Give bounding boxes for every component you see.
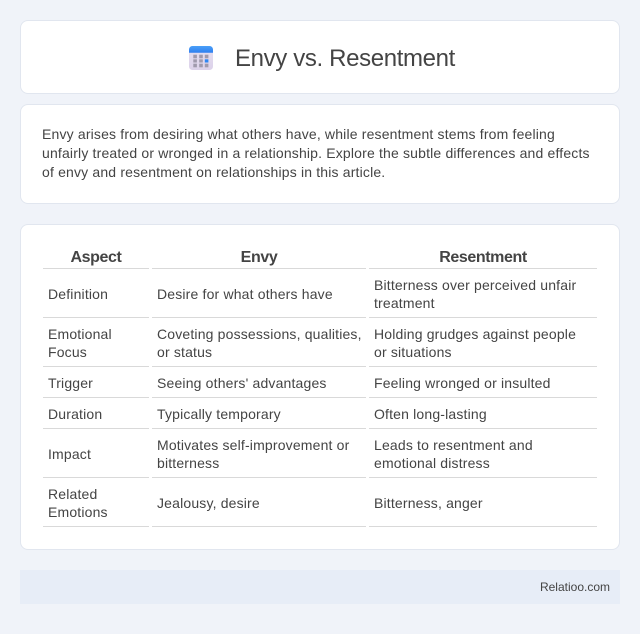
row: duration: Duration [48,406,102,422]
row: impact [43,437,597,478]
row: duration [43,406,597,429]
footer text: Relatioo.com [540,580,610,594]
row: definition: treatment [374,295,435,311]
table header: Resentment [439,249,527,266]
text block: introduction [42,126,590,180]
row: emotional focus: Focus [48,344,87,360]
row: emotional focus [43,326,597,367]
row: trigger: Trigger [48,375,93,391]
panel: introduction [20,104,620,204]
row: emotional focus: or situations [374,344,452,360]
row: related emotions: Related [48,486,97,502]
table header: Aspect [71,249,121,266]
text block: introduction: unfairly treated or wronged in a relationship. Explore the subtle differences and effects [42,145,590,161]
table header [43,249,597,269]
icon: calendar [189,46,213,70]
row: related emotions: Jealousy, desire [157,495,260,511]
row: emotional focus: or status [157,344,212,360]
row: impact: Impact [48,446,91,462]
row: impact: Leads to resentment and [374,437,533,453]
text block: introduction: Envy arises from desiring what others have, while resentment stems from feeling [42,126,555,142]
footer bar [20,570,620,604]
panel: comparison table [20,224,620,550]
row: definition: Definition [48,286,108,302]
row: emotional focus: Emotional [48,326,112,342]
row: definition: Desire for what others have [157,286,333,302]
row: definition [43,277,597,318]
row: related emotions: Bitterness, anger [374,495,483,511]
table header: Envy [241,249,277,266]
row: trigger [43,375,597,398]
text block: introduction: of envy and resentment on relationships in this article. [42,164,385,180]
row: trigger: Feeling wronged or insulted [374,375,551,391]
row: duration: Typically temporary [157,406,281,422]
panel: title card [20,20,620,94]
row: impact: bitterness [157,455,219,471]
row: duration: Often long-lasting [374,406,487,422]
row: emotional focus: Holding grudges against people [374,326,576,342]
row: definition: Bitterness over perceived unfair [374,277,576,293]
title: Envy vs. Resentment [235,45,455,72]
row: impact: Motivates self-improvement or [157,437,349,453]
row: related emotions: Emotions [48,504,108,520]
row: trigger: Seeing others' advantages [157,375,327,391]
row: emotional focus: Coveting possessions, qualities, [157,326,362,342]
row: related emotions [43,486,597,527]
row: impact: emotional distress [374,455,490,471]
